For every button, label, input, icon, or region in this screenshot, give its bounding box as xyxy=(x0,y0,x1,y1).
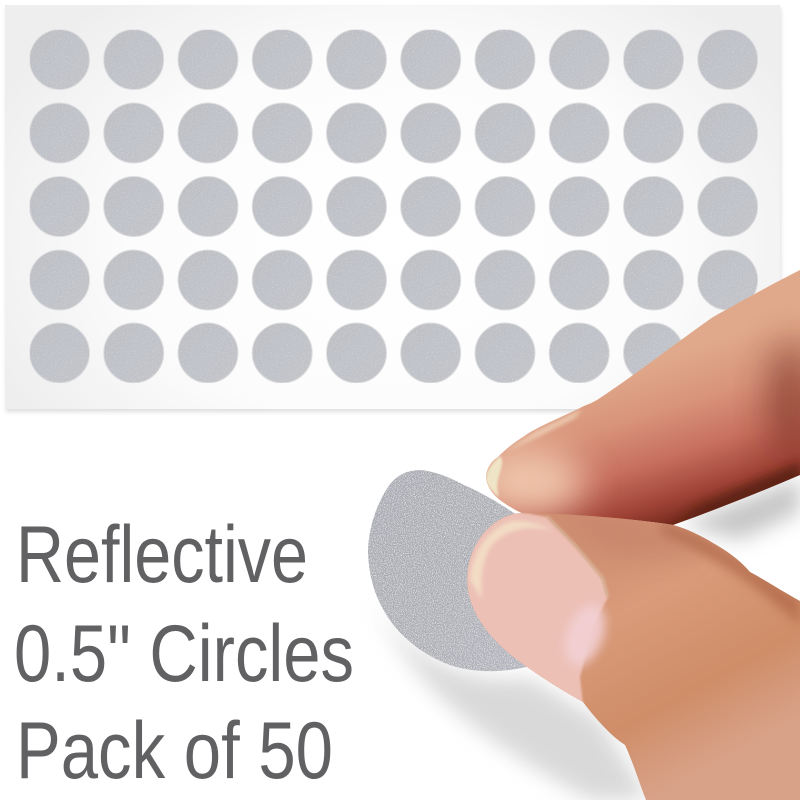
icon: hand pinching sticker xyxy=(460,260,800,800)
heading: product title: 0.5" Circles xyxy=(14,609,354,699)
index finger xyxy=(486,270,800,525)
fingernail of index finger xyxy=(486,456,502,497)
heading: product title: Reflective xyxy=(16,510,308,600)
heading: product title xyxy=(14,510,354,796)
heading: product title: Pack of 50 xyxy=(16,706,333,796)
panel: sticker sheet xyxy=(5,5,780,409)
hand and sticker drop shadow xyxy=(375,478,800,800)
peeled reflective sticker xyxy=(368,470,530,671)
sticker grid: 50 reflective circles xyxy=(30,30,758,383)
thumbnail xyxy=(460,505,608,705)
thumb xyxy=(460,505,800,800)
sticker sheet shadow xyxy=(6,8,781,412)
